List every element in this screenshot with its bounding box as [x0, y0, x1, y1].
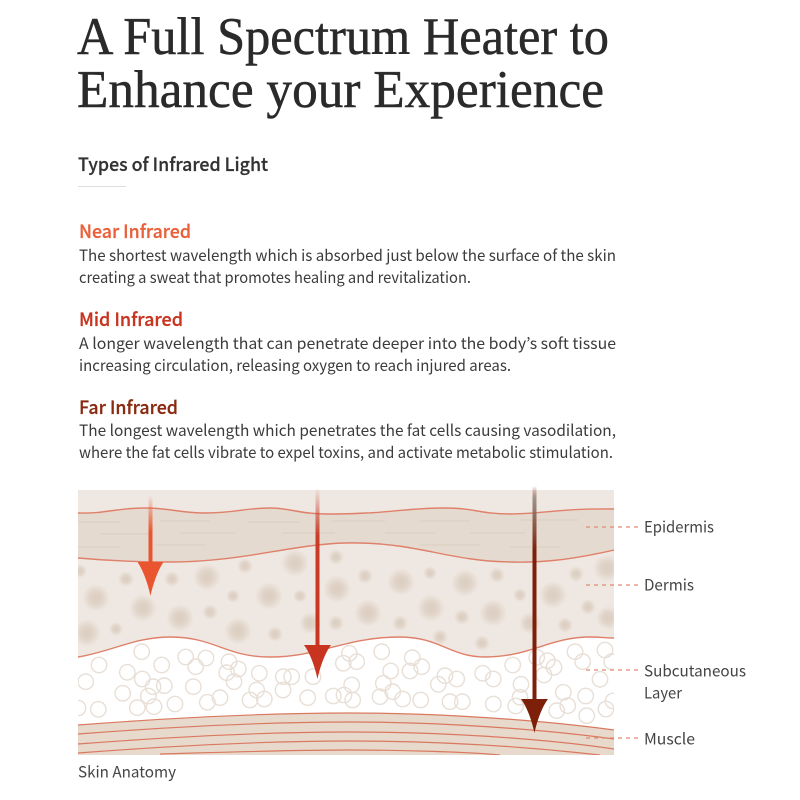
text block: far infrared: The longest wavelength which penetrates the fat cells causing vasodilation,: [79, 419, 616, 441]
label: dermis: Dermis: [644, 574, 694, 596]
label: subcutaneous layer: [644, 660, 746, 704]
text block: near infrared: creating a sweat that promotes healing and revitalization.: [79, 266, 471, 288]
skin boundary lines: [78, 508, 614, 657]
dermis blobs: [73, 549, 621, 651]
text block: mid infrared: Mid Infrared: [79, 306, 183, 332]
text block: near infrared: Near Infrared: [79, 218, 191, 244]
text block: mid infrared: A longer wavelength that can penetrate deeper into the body’s soft tissue: [79, 332, 616, 354]
title: A Full Spectrum Heater to: [77, 8, 609, 66]
arrow: near infrared: [138, 495, 164, 596]
text block: near infrared: [79, 218, 616, 288]
chart: skin anatomy diagram: [70, 486, 640, 755]
subcutaneous fat area: [78, 638, 614, 660]
label: subcutaneous layer: Subcutaneous: [644, 660, 746, 682]
arrow: far infrared: [521, 486, 548, 733]
leader lines: [586, 527, 640, 738]
text block: mid infrared: increasing circulation, releasing oxygen to reach injured areas.: [79, 354, 511, 376]
muscle fibres: [78, 713, 614, 755]
text block: far infrared: Far Infrared: [79, 394, 178, 420]
skin layers: [70, 490, 621, 755]
epidermis strata: [78, 520, 578, 547]
arrow: mid infrared: [304, 488, 331, 679]
text block: near infrared: The shortest wavelength which is absorbed just below the surface of the skin: [79, 244, 616, 266]
title: Enhance your Experience: [77, 61, 604, 119]
text block: mid infrared: [79, 306, 616, 376]
muscle layer: [78, 713, 614, 755]
label: subcutaneous layer: Layer: [644, 682, 683, 704]
fat cells: [70, 642, 621, 723]
label: epidermis: Epidermis: [644, 516, 714, 538]
caption: Skin Anatomy: [78, 760, 176, 782]
text block: far infrared: [79, 394, 616, 463]
title: [77, 8, 609, 119]
text block: far infrared: where the fat cells vibrate to expel toxins, and activate metabolic stimulation.: [79, 441, 613, 463]
label: muscle: Muscle: [644, 728, 695, 750]
section heading: Types of Infrared Light: [78, 151, 269, 177]
